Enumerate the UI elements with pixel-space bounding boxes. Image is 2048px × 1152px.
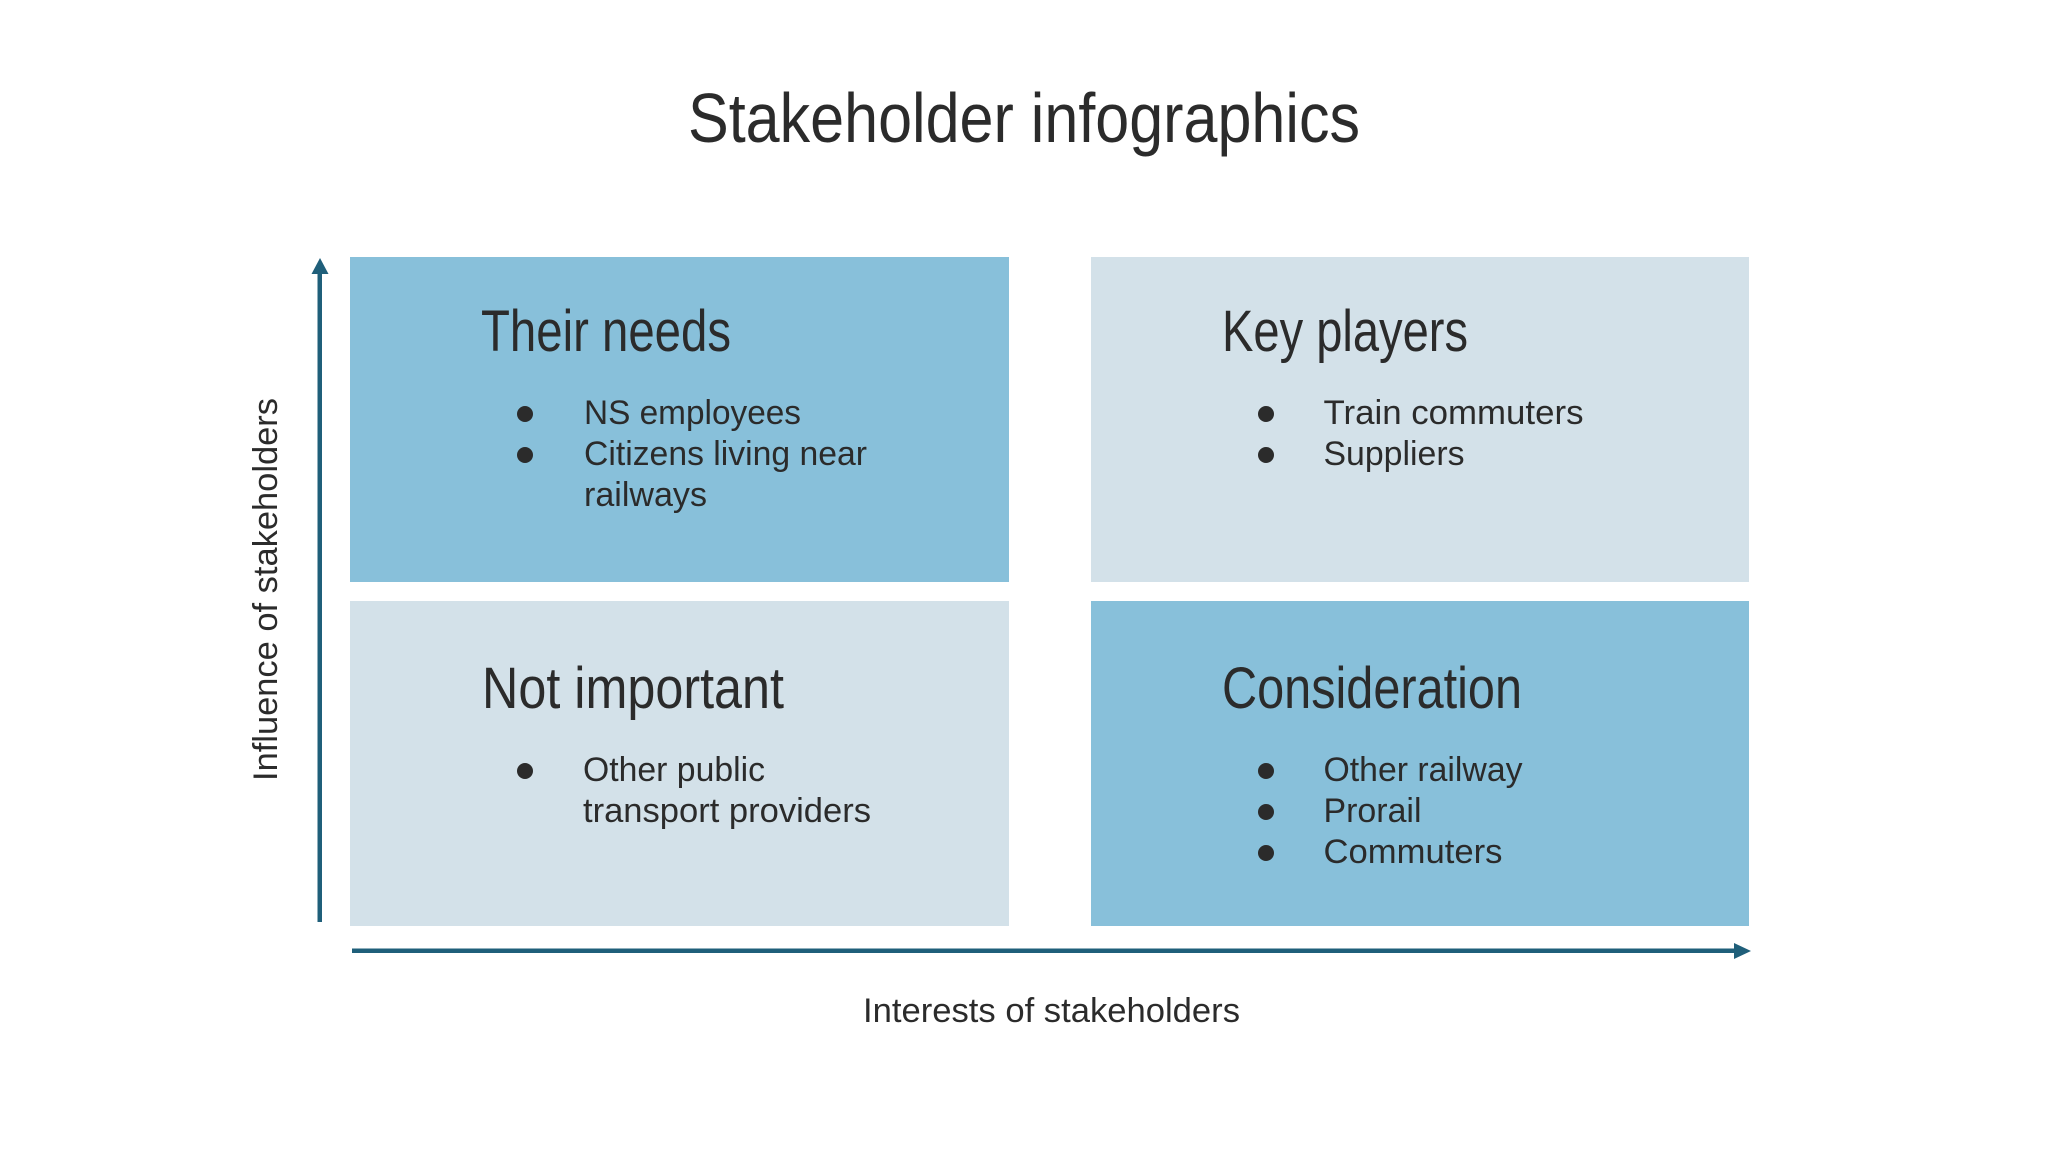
list: their needs: NS employees [584, 394, 801, 432]
list: consideration [1258, 751, 1522, 871]
panel: their needs [350, 257, 1009, 582]
heading: key players: Key players [1222, 299, 1468, 364]
panel: key players [1091, 257, 1749, 582]
list: consideration: Prorail [1324, 792, 1422, 830]
panel: consideration [1091, 601, 1749, 926]
list: their needs [517, 394, 867, 514]
arrow: horizontal interests axis [352, 943, 1751, 959]
heading: consideration: Consideration [1222, 656, 1522, 721]
list: consideration: Commuters [1324, 833, 1502, 871]
list: key players: Suppliers [1324, 435, 1464, 473]
list: consideration: Other railway [1324, 751, 1522, 789]
label: x axis: Interests of stakeholders [863, 992, 1240, 1030]
list: their needs: railways [584, 476, 707, 514]
list: not important: transport providers [583, 792, 871, 830]
list: their needs: Citizens living near [584, 435, 867, 473]
list: key players [1258, 394, 1584, 473]
list: key players: Train commuters [1324, 394, 1584, 432]
heading: their needs: Their needs [481, 299, 731, 364]
label: y axis: Influence of stakeholders [247, 398, 285, 781]
list: not important [517, 751, 871, 830]
arrow: vertical influence axis [312, 258, 328, 922]
list: not important: Other public [583, 751, 765, 789]
panel: not important [350, 601, 1009, 926]
title: Stakeholder infographics [688, 79, 1360, 157]
heading: not important: Not important [482, 656, 784, 721]
